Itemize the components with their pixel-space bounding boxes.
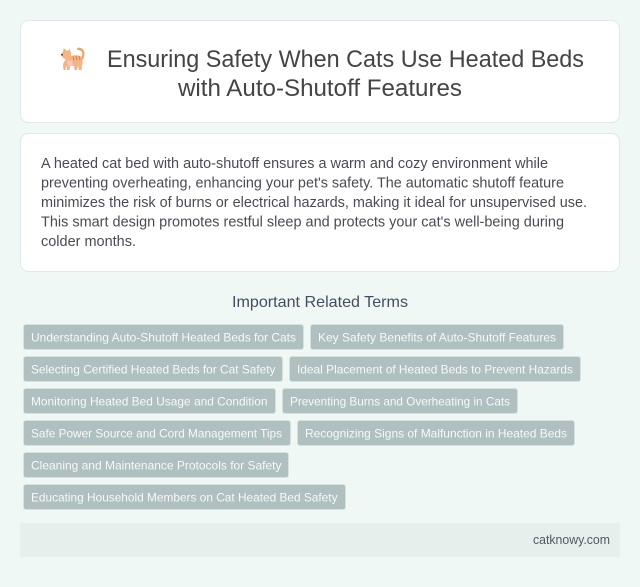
panel: summary card	[20, 134, 620, 272]
tag	[310, 324, 564, 350]
heading: important related terms: Important Related Terms	[232, 294, 408, 311]
tag: Preventing Burns and Overheating in Cats	[290, 394, 510, 408]
title line 2: with Auto-Shutoff Features	[177, 75, 462, 102]
footer bar	[20, 523, 620, 557]
tag: Cleaning and Maintenance Protocols for Safety	[31, 458, 282, 472]
tag	[290, 356, 580, 382]
tag	[24, 356, 282, 382]
panel: related term tags	[24, 324, 580, 510]
tag: Monitoring Heated Bed Usage and Condition	[31, 394, 268, 408]
tag: Understanding Auto-Shutoff Heated Beds for Cats	[31, 330, 296, 344]
summary text	[41, 155, 587, 250]
tag	[298, 420, 574, 446]
footer source text: catknowy.com	[533, 532, 610, 547]
tag	[282, 388, 518, 414]
tag: Recognizing Signs of Malfunction in Heated Beds	[305, 426, 567, 440]
title line 1: Ensuring Safety When Cats Use Heated Beds	[107, 46, 584, 73]
summary text: This smart design promotes restful sleep and protects your cat's well-being during	[41, 214, 564, 230]
tag	[24, 484, 346, 510]
panel: title card	[20, 20, 620, 122]
summary text: A heated cat bed with auto-shutoff ensures a warm and cozy environment while	[41, 155, 548, 172]
tag	[24, 324, 304, 350]
tag: Selecting Certified Heated Beds for Cat Safety	[31, 362, 276, 376]
summary text: minimizes the risk of burns or electrical hazards, making it ideal for unsupervised use.	[41, 194, 587, 211]
tag	[24, 420, 290, 446]
tag: Educating Household Members on Cat Heated Bed Safety	[31, 490, 338, 504]
summary text: colder months.	[41, 233, 136, 250]
tag: Ideal Placement of Heated Beds to Prevent Hazards	[297, 362, 573, 376]
tag	[24, 388, 276, 414]
tag: Key Safety Benefits of Auto-Shutoff Features	[318, 330, 556, 344]
icon: orange cat	[61, 48, 84, 70]
tag: Safe Power Source and Cord Management Tips	[31, 426, 282, 440]
summary text: preventing overheating, enhancing your pet's safety. The automatic shutoff feature	[41, 174, 564, 192]
tag	[24, 452, 288, 478]
